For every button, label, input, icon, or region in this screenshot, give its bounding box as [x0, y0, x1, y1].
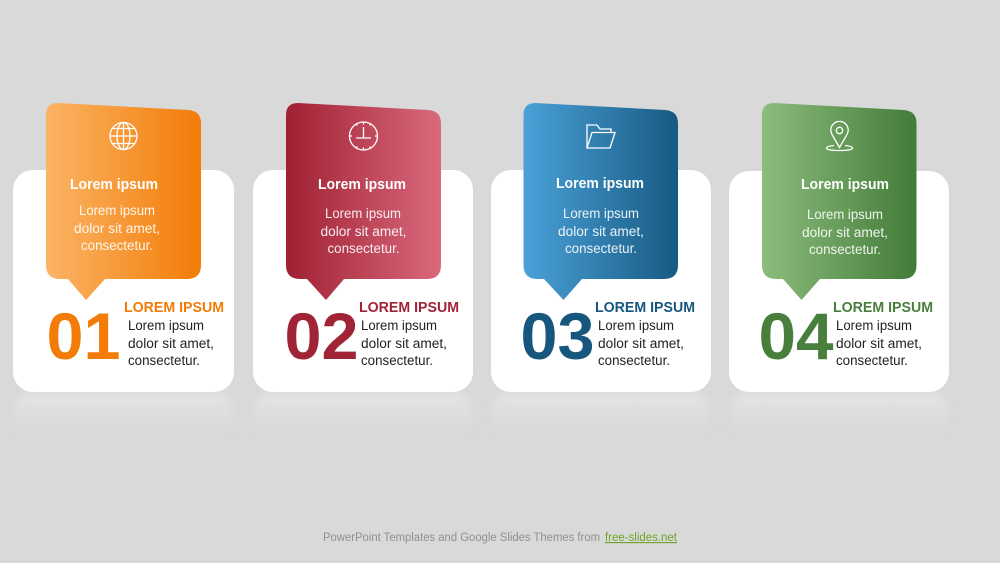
callout text 04: dolor sit amet,: [802, 225, 888, 240]
callout text 02: consectetur.: [328, 241, 400, 256]
description 03: Lorem ipsum: [598, 318, 674, 333]
card reflection 02: [255, 393, 471, 433]
card reflection 04: [731, 393, 947, 433]
card reflection 01: [15, 393, 232, 433]
callout text 03: dolor sit amet,: [558, 224, 644, 239]
callout heading 04: Lorem ipsum: [801, 177, 889, 193]
footer credit: free-slides.net: [605, 532, 678, 544]
callout text 04: Lorem ipsum: [807, 207, 883, 222]
description 02: Lorem ipsum: [361, 318, 437, 333]
white card 04: [729, 171, 949, 392]
callout shape 01: [46, 103, 201, 300]
description 01: consectetur.: [128, 353, 200, 368]
description 04: Lorem ipsum: [836, 318, 912, 333]
panel: step 03: [491, 103, 711, 433]
description 04: [836, 318, 922, 368]
description 03: dolor sit amet,: [598, 336, 684, 351]
number 04: 04: [758, 299, 834, 373]
footer credit: PowerPoint Templates and Google Slides Themes from: [323, 532, 600, 544]
callout shape 02: [286, 103, 441, 300]
callout text 03: Lorem ipsum: [563, 206, 639, 221]
icon: clock: [350, 122, 378, 150]
description 02: consectetur.: [361, 353, 433, 368]
description 01: Lorem ipsum: [128, 318, 204, 333]
icon: globe: [110, 122, 137, 150]
callout text 01: dolor sit amet,: [74, 221, 160, 236]
description 02: [361, 318, 447, 368]
callout text 02: Lorem ipsum: [325, 206, 401, 221]
callout text 02: [320, 206, 406, 256]
number 01: 01: [46, 299, 120, 373]
description 01: [128, 318, 214, 368]
panel: step 01: [13, 103, 234, 433]
callout shape 04: [762, 103, 916, 300]
callout heading 03: Lorem ipsum: [556, 176, 644, 192]
subheading 02: LOREM IPSUM: [359, 300, 459, 316]
panel: step 02: [253, 103, 473, 433]
panel: step 04: [729, 103, 949, 433]
callout text 03: consectetur.: [565, 241, 637, 256]
icon: map pin: [826, 121, 852, 150]
icon: folder: [587, 125, 615, 148]
description 04: consectetur.: [836, 353, 908, 368]
white card 02: [253, 170, 473, 392]
callout text 03: [558, 206, 644, 256]
description 04: dolor sit amet,: [836, 336, 922, 351]
callout heading 01: Lorem ipsum: [70, 177, 158, 193]
callout shape 03: [524, 103, 678, 300]
callout text 04: [802, 207, 888, 257]
number 02: 02: [284, 299, 358, 373]
subheading 03: LOREM IPSUM: [595, 300, 695, 316]
subheading 01: LOREM IPSUM: [124, 300, 224, 316]
description 02: dolor sit amet,: [361, 336, 447, 351]
callout text 01: consectetur.: [81, 238, 153, 253]
number 03: 03: [520, 299, 594, 373]
description 03: [598, 318, 684, 368]
callout heading 02: Lorem ipsum: [318, 177, 406, 193]
subheading 04: LOREM IPSUM: [833, 300, 933, 316]
callout text 01: [74, 203, 160, 253]
description 03: consectetur.: [598, 353, 670, 368]
description 01: dolor sit amet,: [128, 336, 214, 351]
callout text 02: dolor sit amet,: [320, 224, 406, 239]
callout text 01: Lorem ipsum: [79, 203, 155, 218]
white card 03: [491, 170, 711, 392]
card reflection 03: [493, 393, 709, 433]
white card 01: [13, 170, 234, 392]
callout text 04: consectetur.: [809, 242, 881, 257]
